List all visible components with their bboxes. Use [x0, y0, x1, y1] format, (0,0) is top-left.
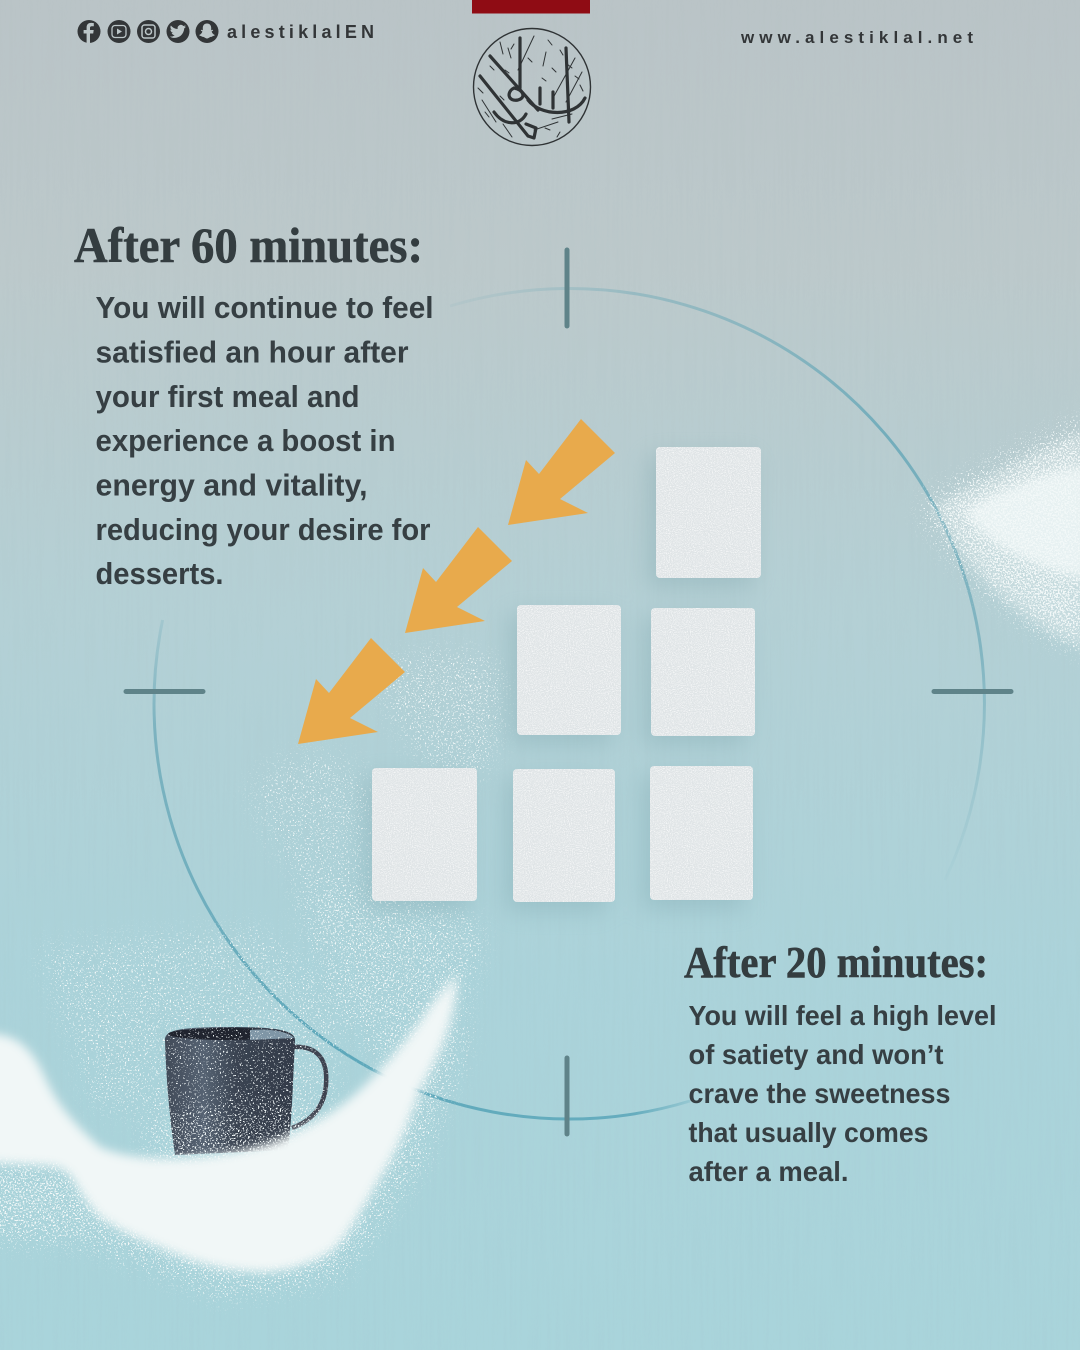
text block: after 60 minutes: reducing your desire for — [96, 512, 430, 547]
icon: snapchat — [199, 24, 215, 38]
arrow 2 — [405, 527, 512, 633]
header bar: red tab — [472, 0, 590, 14]
cube faces — [372, 447, 761, 902]
text block: after 60 minutes: energy and vitality, — [96, 468, 368, 502]
sugar speckles over mug — [150, 1020, 330, 1170]
sugar swoosh — [0, 975, 462, 1292]
sugar cubes — [364, 447, 761, 911]
text block: after 60 minutes: experience a boost in — [96, 423, 396, 458]
logo emblem — [474, 28, 590, 146]
text block: after 20 minutes: after a meal. — [688, 1156, 848, 1187]
text block: after 20 minutes: crave the sweetness — [688, 1078, 950, 1109]
social handle: alestiklalEN — [227, 22, 374, 42]
icon: instagram — [142, 25, 155, 38]
target ring with tick marks — [126, 250, 1011, 1134]
arrow 1 — [508, 419, 615, 525]
sugar pile right edge — [925, 425, 1080, 650]
mug — [165, 1027, 326, 1155]
text block: after 20 minutes: You will feel a high level — [688, 1000, 996, 1031]
icon: facebook — [84, 23, 94, 43]
heading: after 60 minutes: After 60 minutes: — [74, 217, 423, 273]
text block: after 60 minutes: your first meal and — [96, 379, 360, 414]
text block: after 60 minutes: desserts. — [96, 556, 224, 591]
icon: youtube — [112, 26, 126, 38]
icon: twitter — [170, 25, 186, 38]
arrow 3 — [298, 638, 405, 744]
text block: after 60 minutes: satisfied an hour after — [96, 334, 408, 370]
text block: after 20 minutes: of satiety and won’t — [688, 1039, 944, 1070]
cube shadows — [364, 456, 753, 911]
text block: after 60 minutes — [96, 290, 434, 591]
text block: after 20 minutes: that usually comes — [688, 1117, 928, 1148]
arrows pointing down-left — [298, 419, 615, 744]
sugar dust around lower cubes — [40, 655, 501, 1110]
text block: after 20 minutes — [688, 1000, 996, 1187]
heading: after 20 minutes: After 20 minutes: — [684, 938, 988, 987]
text block: after 60 minutes: You will continue to feel — [96, 290, 434, 325]
website url: www.alestiklal.net — [740, 28, 973, 47]
social icons — [78, 20, 218, 43]
